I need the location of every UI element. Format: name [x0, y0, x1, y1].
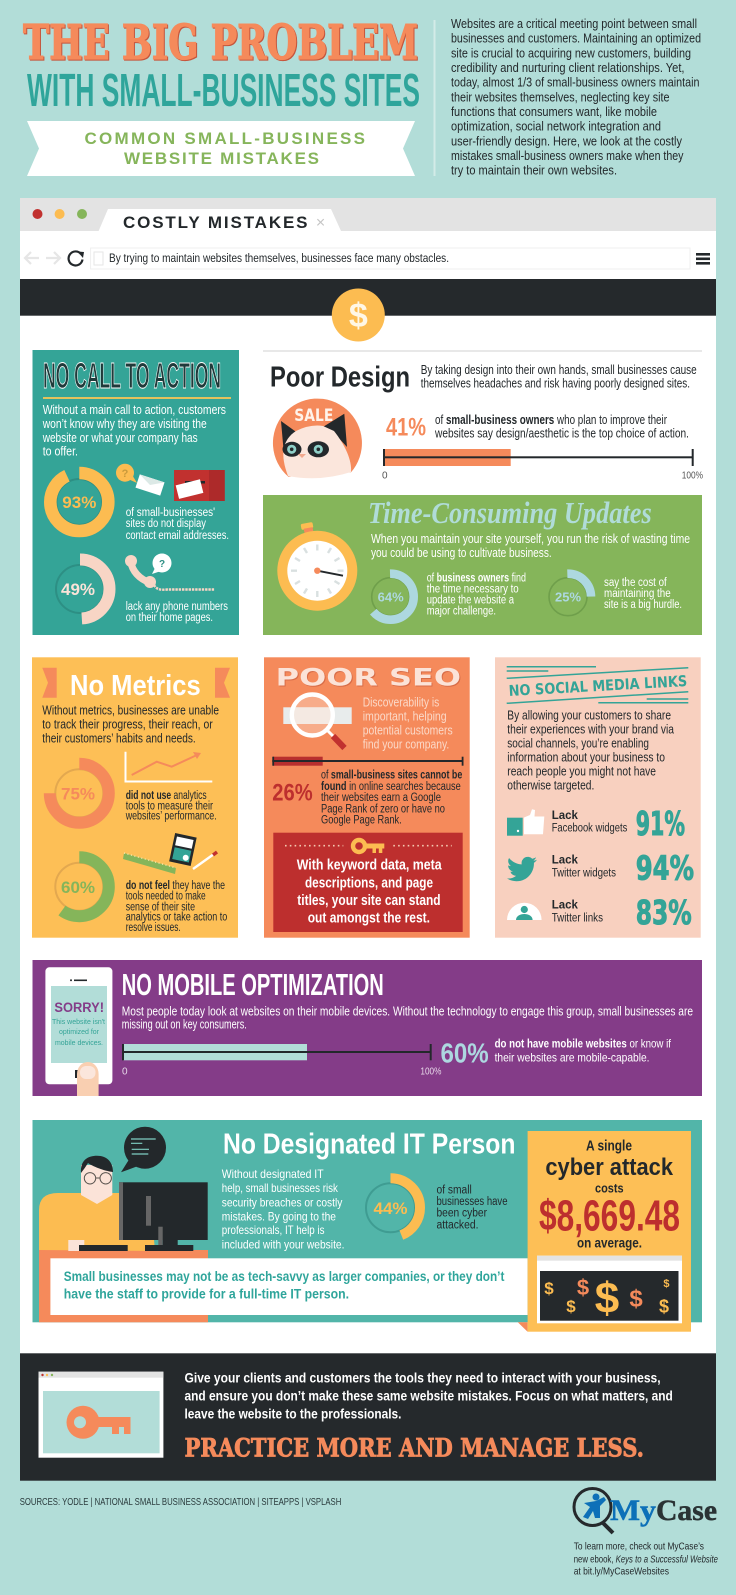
cyber attack cost card: on average.: [577, 1234, 642, 1250]
description: [421, 363, 697, 390]
white callout strip: have the staff to provide for a full-time IT person.: [64, 1285, 349, 1301]
donut 49 percent: 49%: [61, 580, 95, 599]
description: website or what your company has: [42, 431, 198, 445]
stat text: [321, 770, 462, 826]
donut 93 percent: 93%: [62, 493, 96, 512]
cost figure: $8,669.48: [539, 1193, 680, 1241]
stat text 25 percent: say the cost of: [604, 577, 667, 589]
panel: no designated it person: [32, 1120, 702, 1332]
donut 75 percent: [50, 764, 109, 823]
description: [42, 703, 219, 745]
email stat text: of small-businesses': [126, 507, 215, 519]
stat text: found in online searches because: [321, 781, 461, 793]
stat text: do not have mobile websites or know if: [495, 1036, 672, 1050]
intro paragraph: optimization, social network integration and: [451, 120, 661, 134]
icon: email question: [116, 464, 165, 496]
intro paragraph: today, almost 1/3 of small-business owners maintain: [451, 76, 700, 90]
stat text: their websites earn a Google: [321, 792, 441, 804]
description: [42, 403, 226, 459]
dark page header bar: [20, 279, 716, 316]
mini browser with dollars: $: [629, 1286, 643, 1312]
icon: phone with finger: mobile devices.: [55, 1038, 103, 1047]
intro paragraph: mistakes small-business owners make when they: [451, 149, 684, 163]
ribbon ends: [42, 668, 230, 698]
description: Discoverability is: [363, 696, 439, 710]
twitter links stat: Lack: [552, 900, 579, 912]
stat text 64 percent: of business owners find: [427, 573, 526, 585]
facebook stat: [552, 804, 685, 843]
donut 25 percent: 25%: [555, 590, 581, 604]
twitter links stat: [552, 893, 692, 932]
heading: No Metrics: [70, 670, 201, 702]
icon: phone with finger: [45, 967, 112, 1096]
browser window: [20, 198, 716, 1354]
sources: SOURCES: YODLE | NATIONAL SMALL BUSINESS ASSOCIATION | SITEAPPS | VSPLASH: [20, 1497, 341, 1508]
twitter widgets stat: Lack: [552, 855, 579, 867]
ribbon subtitle: WEBSITE MISTAKES: [124, 149, 319, 168]
stat text 64 percent: major challenge.: [427, 606, 496, 618]
stat text: of small: [436, 1184, 472, 1196]
intro paragraph: [451, 17, 701, 178]
navigation icons: [25, 251, 84, 265]
analytics stat text: tools to measure their: [126, 800, 213, 812]
progress bar 26 percent: [272, 757, 464, 766]
description: you could be using to cultivate business.: [371, 546, 552, 560]
stat text: of small-business sites cannot be: [321, 770, 462, 782]
description: [222, 1167, 344, 1251]
ribbon subtitle: COMMON SMALL-BUSINESS: [84, 129, 365, 148]
donut 44 percent: 44%: [373, 1199, 408, 1218]
ribbon subtitle: [27, 121, 415, 176]
twitter widgets stat: 94%: [636, 848, 694, 887]
analytics stat text: websites’ performance.: [125, 810, 217, 822]
mini browser with dollars: $: [595, 1274, 619, 1323]
panel: no metrics: [32, 657, 238, 938]
mini browser with dollars: [537, 1256, 682, 1323]
menu icon: [696, 253, 710, 265]
progress bar 41 percent: 100%: [682, 471, 703, 482]
progress bar 60 percent: 100%: [420, 1066, 441, 1077]
tools stat text: resolve issues.: [126, 922, 181, 934]
progress bar 60 percent: 0: [122, 1066, 128, 1077]
panel: no call to action: NO CALL TO ACTION: [43, 355, 221, 396]
white callout strip: [50, 1258, 528, 1315]
donut 60 percent: [50, 857, 109, 916]
icon: telephone: ?: [159, 559, 165, 570]
address bar: By trying to maintain websites themselves, businesses face many obstacles.: [109, 251, 449, 265]
analytics stat text: did not use analytics: [126, 790, 207, 802]
callout box: descriptions, and page: [305, 875, 433, 891]
analytics stat text: [125, 790, 217, 822]
icon: magnifying glass: [283, 694, 352, 748]
closing text: leave the website to the professionals.: [184, 1405, 401, 1421]
stat text: [436, 1184, 508, 1231]
tools stat text: tools needed to make: [126, 890, 206, 902]
panel: closing call to action: [20, 1353, 716, 1481]
icon: grumpy cat: [273, 399, 362, 478]
intro paragraph: Websites are a critical meeting point between small: [451, 17, 697, 31]
facebook stat: Lack: [552, 810, 579, 822]
icon: grumpy cat: SALE: [294, 406, 333, 426]
stat text: businesses have: [436, 1196, 508, 1208]
description: professionals, IT help is: [222, 1223, 324, 1237]
closing text: [184, 1369, 673, 1421]
donut 60 percent: 60%: [61, 878, 95, 897]
icon: phone with finger: This website isn't: [52, 1017, 106, 1026]
phone stat text: lack any phone numbers: [126, 601, 228, 613]
phone stat text: [126, 601, 228, 624]
browser tab: COSTLY MISTAKES: [123, 213, 308, 232]
stat text: their websites are mobile-capable.: [495, 1051, 650, 1065]
twitter links stat: Twitter links: [552, 913, 603, 925]
description: find your company.: [363, 738, 449, 752]
cyber attack cost card: [518, 1131, 691, 1332]
panel: poor seo: [264, 657, 470, 938]
orange desk: [39, 1250, 208, 1322]
mycase logo: Case: [656, 1494, 717, 1527]
stat text: Google Page Rank.: [321, 814, 402, 826]
facebook stat: Facebook widgets: [552, 823, 627, 835]
panel: poor design: [263, 350, 703, 482]
dollar badge: [332, 288, 385, 342]
icons: ruler calculator pencil: [123, 833, 217, 874]
icon: key: [353, 840, 384, 853]
heading: No Designated IT Person: [223, 1128, 516, 1160]
description: help, small businesses risk: [222, 1181, 339, 1195]
mycase logo: [574, 1488, 717, 1533]
intro paragraph: user-friendly design. Here, we look at the costly: [451, 134, 683, 148]
stat text 25 percent: site is a big hurdle.: [604, 599, 682, 611]
stat text: Page Rank of zero or have no: [321, 803, 445, 815]
description: information about your business to: [507, 750, 665, 764]
stat text 25 percent: maintaining the: [604, 588, 671, 600]
intro paragraph: functions that consumers want, like mobile: [451, 105, 657, 119]
closing slogan: PRACTICE MORE AND MANAGE LESS.: [184, 1434, 644, 1463]
description: won’t know why they are visiting the: [42, 417, 207, 431]
cyber attack cost card: costs: [595, 1181, 624, 1196]
callout box: out amongst the rest.: [308, 911, 430, 927]
callout box: titles, your site can stand: [297, 893, 441, 909]
heading: Time-Consuming Updates: [368, 495, 652, 530]
email stat text: contact email addresses.: [126, 530, 229, 542]
stat text 64 percent: [427, 573, 526, 618]
stat text: attacked.: [436, 1219, 478, 1231]
ebook note: [574, 1541, 718, 1577]
description: reach people you might not have: [507, 764, 656, 778]
donut 25 percent: [545, 574, 591, 620]
description: included with your website.: [222, 1237, 344, 1251]
progress bar 41 percent: [382, 449, 703, 482]
description: [122, 1005, 693, 1032]
description: Without a main call to action, customers: [43, 403, 226, 417]
twitter widgets stat: [552, 848, 694, 887]
callout box: With keyword data, meta: [297, 857, 442, 873]
stat text: been cyber: [436, 1208, 487, 1220]
icon: twitter bird: [507, 857, 537, 881]
mini browser with dollars: $: [659, 1296, 669, 1316]
description: their customers’ habits and needs.: [42, 731, 196, 745]
stat 60 percent: 60%: [440, 1037, 489, 1068]
donut 64 percent: 64%: [378, 590, 404, 604]
stat 26 percent: 26%: [272, 780, 313, 807]
panel: no social media links: [495, 657, 701, 938]
stat text 64 percent: the time necessary to: [427, 584, 519, 596]
cyber attack cost card: cyber attack: [545, 1154, 674, 1181]
stat text 64 percent: update the website a: [427, 595, 514, 607]
stat text: [495, 1036, 672, 1065]
tools stat text: [126, 880, 227, 934]
closing text: Give your clients and customers the tools they need to interact with your business,: [184, 1369, 661, 1385]
panel: no call to action: [32, 350, 239, 635]
icon: telephone: [125, 554, 215, 590]
description: [371, 532, 690, 560]
twitter links stat: 83%: [636, 893, 692, 932]
intro paragraph: site is crucial to acquiring new customers, building: [451, 46, 691, 60]
ebook note: at bit.ly/MyCaseWebsites: [574, 1565, 669, 1577]
line chart icon: [126, 752, 212, 782]
description: By allowing your customers to share: [507, 708, 671, 722]
description: potential customers: [363, 724, 453, 738]
description: otherwise targeted.: [507, 778, 594, 792]
stat text 25 percent: [604, 577, 682, 611]
heading with rules: NO SOCIAL MEDIA LINKS: [508, 672, 688, 700]
panel: time-consuming updates: [263, 495, 702, 635]
icon: red mailbox: [174, 470, 225, 501]
illustration: man at computer: [39, 1127, 208, 1251]
address bar: [91, 248, 690, 269]
tools stat text: analytics or take action to: [126, 912, 227, 924]
window dots: [32, 209, 87, 219]
icon: key: [66, 1406, 130, 1439]
description: missing out on key consumers.: [122, 1018, 247, 1032]
browser tab: ×: [316, 214, 325, 232]
icon: email question: ?: [122, 468, 129, 480]
description: [363, 696, 453, 752]
heading: POOR SEO: [276, 664, 461, 692]
intro paragraph: try to maintain their own websites.: [451, 164, 617, 178]
phone stat text: on their home pages.: [126, 612, 213, 624]
title line two: WITH SMALL-BUSINESS SITES: [27, 64, 420, 116]
description: to offer.: [43, 445, 78, 459]
intro paragraph: their websites themselves, neglecting key site: [451, 90, 670, 104]
title line one: THE BIG PROBLEM: [23, 15, 418, 71]
description: Without metrics, businesses are unable: [42, 703, 219, 717]
description: social channels, you’re enabling: [507, 736, 649, 750]
panel: no mobile optimization: [32, 960, 702, 1096]
header: [23, 15, 701, 178]
description: important, helping: [363, 710, 447, 724]
ebook note: To learn more, check out MyCase’s: [574, 1541, 704, 1553]
mini browser with dollars: $: [663, 1278, 669, 1290]
icon: phone with finger: SORRY!: [54, 1000, 104, 1015]
progress bar 41 percent: 0: [382, 471, 388, 482]
heading: NO MOBILE OPTIMIZATION: [122, 968, 384, 1002]
description: their experiences with your brand via: [507, 722, 674, 736]
facebook stat: 91%: [636, 804, 685, 843]
donut 75 percent: 75%: [61, 784, 95, 804]
icon: phone with finger: optimized for: [59, 1027, 99, 1036]
description: Without designated IT: [222, 1167, 324, 1181]
dollar badge: $: [349, 297, 368, 335]
progress bar 60 percent: [122, 1044, 441, 1077]
callout box: [273, 833, 463, 932]
stat text: of small-business owners who plan to improve their: [435, 413, 667, 427]
cyber attack cost card: A single: [586, 1139, 632, 1155]
stat 41 percent: 41%: [386, 414, 426, 442]
tools stat text: do not feel they have the: [126, 880, 225, 892]
intro paragraph: credibility and nurturing client relationships. Yet,: [451, 61, 684, 75]
mini browser with dollars: $: [544, 1279, 554, 1298]
icon: person: [507, 903, 542, 920]
tools stat text: sense of their site: [126, 901, 195, 913]
donut 93 percent: [50, 473, 108, 531]
description: mistakes. By going to the: [222, 1210, 336, 1224]
mini browser with key: [38, 1372, 163, 1458]
email stat text: sites do not display: [126, 518, 206, 530]
mini browser with dollars: $: [577, 1275, 589, 1300]
mycase logo: My: [610, 1494, 656, 1527]
browser tab: [99, 209, 341, 232]
icon: stopwatch: [277, 522, 357, 611]
description: [507, 708, 674, 792]
email stat text: [126, 507, 229, 542]
twitter widgets stat: Twitter widgets: [552, 868, 616, 880]
description: to track their progress, their reach, or: [42, 717, 213, 731]
icon: thumbs up: [507, 809, 544, 836]
stat text: [434, 413, 689, 440]
white callout strip: Small businesses may not be as tech-savvy as larger companies, or they don’t: [64, 1268, 505, 1284]
donut 44 percent: [361, 1178, 420, 1237]
donut 49 percent: [50, 560, 110, 618]
heading: Poor Design: [270, 362, 410, 394]
donut 64 percent: [368, 574, 414, 620]
mini browser with dollars: $: [566, 1297, 576, 1316]
description: security breaches or costly: [222, 1196, 342, 1210]
